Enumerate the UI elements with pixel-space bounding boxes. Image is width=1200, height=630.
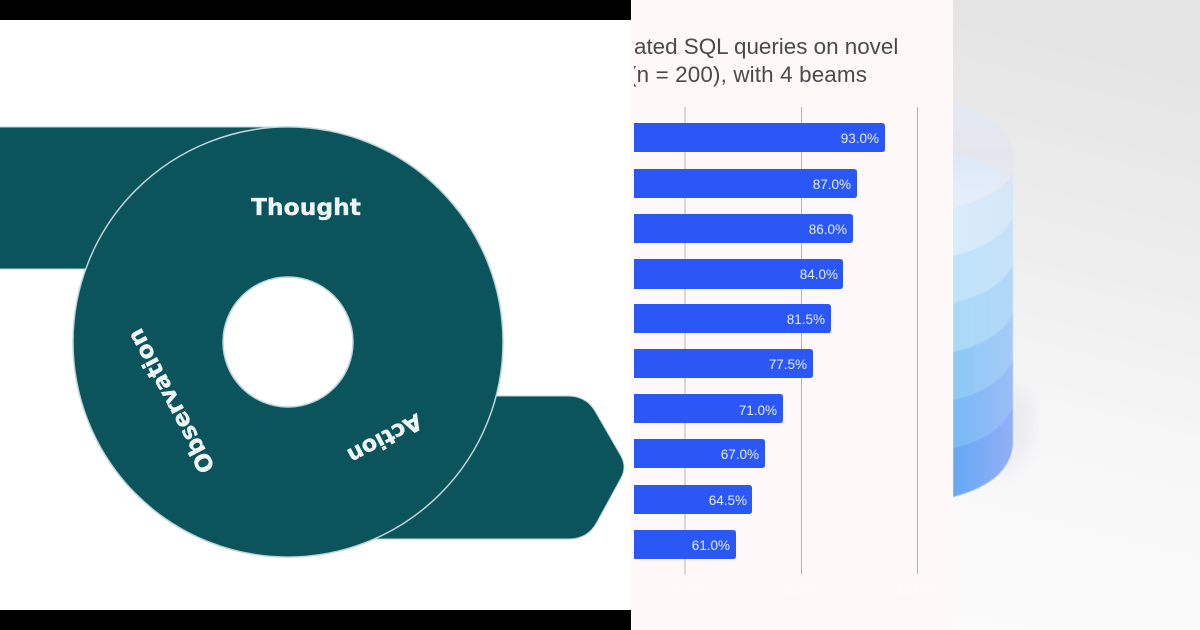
x axis labels — [671, 583, 938, 597]
bar 64.5%: 64.5% — [709, 493, 747, 508]
left arrow band — [0, 127, 300, 269]
icon: layered cylinder — [953, 103, 1013, 497]
chart title: ated SQL queries on novel — [634, 34, 898, 59]
chart title: (n = 200), with 4 beams — [629, 62, 867, 87]
x axis labels: 60.0% — [671, 583, 705, 597]
label: Observation: Observation — [122, 324, 221, 478]
black bar: bottom — [0, 610, 631, 630]
bar 93.0%: 93.0% — [841, 131, 879, 146]
x axis labels: 100.0% — [897, 583, 938, 597]
bar 67.0% — [634, 439, 765, 468]
panel: database background — [953, 0, 1200, 630]
bar 77.5% — [634, 349, 813, 378]
bar 77.5%: 77.5% — [769, 357, 807, 372]
bar 87.0%: 87.0% — [813, 177, 851, 192]
bar 93.0% — [634, 123, 885, 152]
bar chart — [634, 123, 885, 559]
black bar: top — [0, 0, 631, 20]
bar 86.0% — [634, 214, 853, 243]
panel: bar chart card — [634, 38, 953, 574]
label: Action: Action — [343, 408, 426, 469]
bar 87.0% — [634, 169, 857, 198]
bar 84.0% — [634, 259, 843, 289]
bar 86.0%: 86.0% — [809, 222, 847, 237]
bar 81.5% — [634, 304, 831, 333]
right arrow band — [340, 396, 624, 539]
bar 71.0% — [634, 394, 783, 423]
bar 67.0%: 67.0% — [721, 447, 759, 462]
label: Thought: Thought — [251, 193, 361, 221]
bar 81.5%: 81.5% — [787, 312, 825, 327]
chart title — [634, 38, 897, 86]
panel: cycle diagram — [0, 0, 631, 630]
bar 61.0% — [634, 530, 736, 559]
grid lines — [685, 107, 918, 574]
bar 64.5% — [634, 485, 752, 514]
bar 71.0%: 71.0% — [739, 403, 777, 418]
bar 61.0%: 61.0% — [692, 538, 730, 553]
bar 84.0%: 84.0% — [800, 267, 838, 282]
cylinder shadow — [1000, 380, 1030, 485]
x axis labels: 80.0% — [784, 583, 818, 597]
ring body — [73, 127, 503, 557]
